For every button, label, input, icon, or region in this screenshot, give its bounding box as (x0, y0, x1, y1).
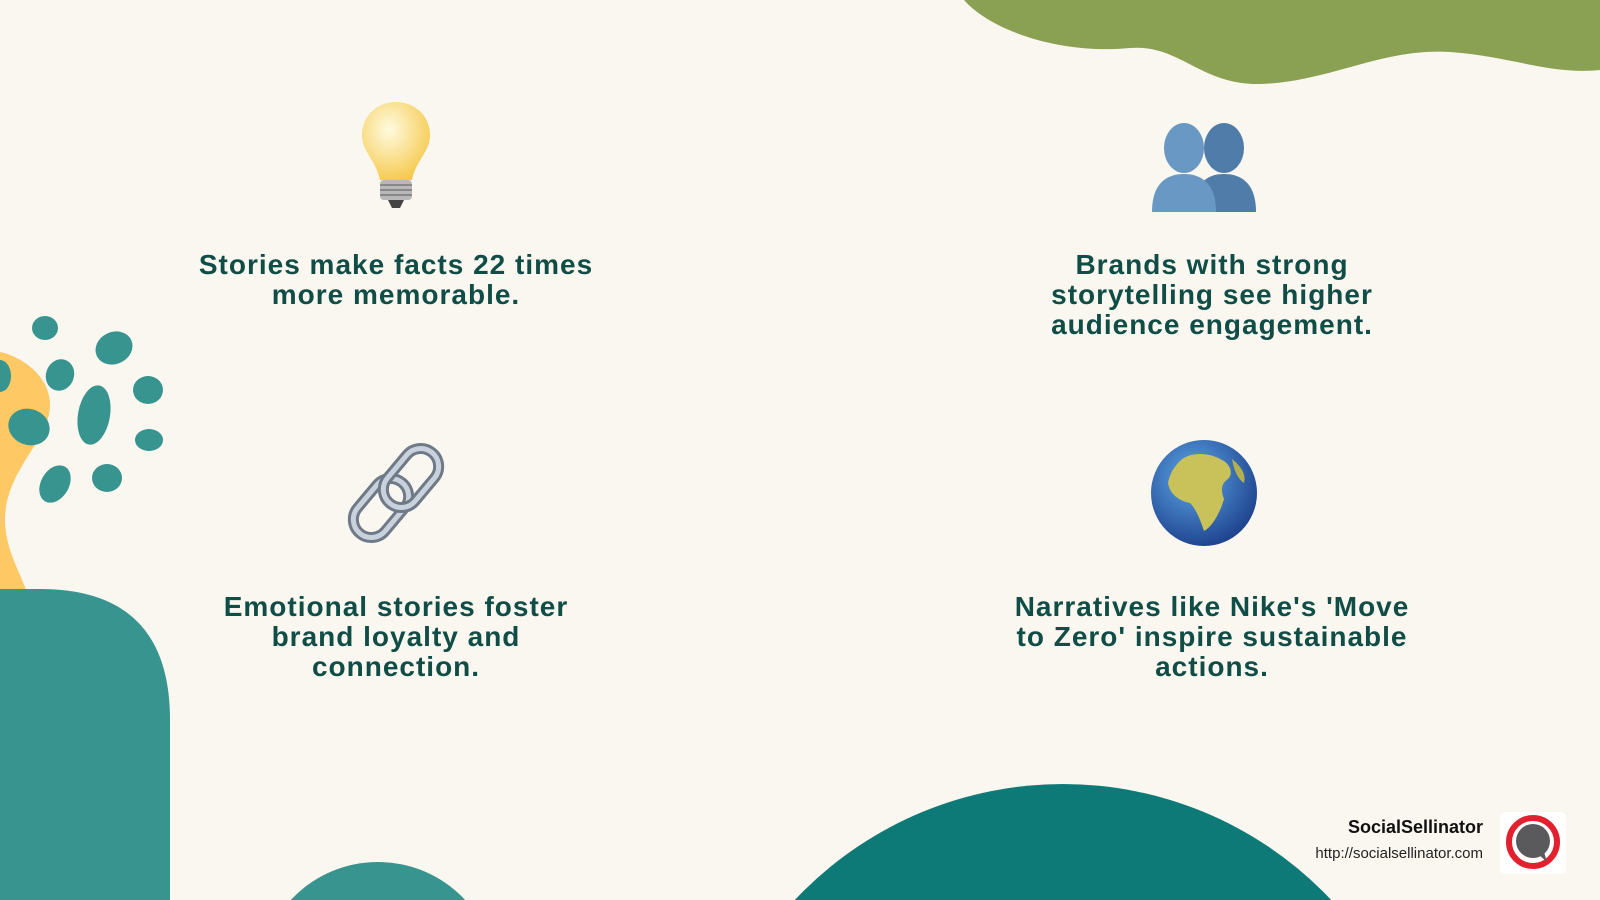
icon: two people (1152, 123, 1256, 212)
text: stat 2: audience engagement. (1051, 309, 1373, 340)
text: stat 4 (1015, 591, 1409, 682)
icon: globe (1151, 440, 1257, 546)
text: stat 2 (1051, 249, 1373, 340)
text: stat 4: to Zero' inspire sustainable (1017, 621, 1407, 652)
text: stat 3: Emotional stories foster (224, 591, 568, 622)
text: stat 2: storytelling see higher (1051, 279, 1373, 310)
brand name: SocialSellinator (1348, 817, 1483, 837)
brand url: http://socialsellinator.com (1315, 845, 1483, 862)
text: stat 3: connection. (312, 651, 480, 682)
text: stat 1 (199, 249, 593, 310)
text: stat 1: more memorable. (272, 279, 520, 310)
text: stat 1: Stories make facts 22 times (199, 249, 593, 280)
brand block (1315, 812, 1566, 874)
text: stat 3: brand loyalty and (272, 621, 520, 652)
icon: light bulb (362, 102, 430, 208)
text: stat 2: Brands with strong (1075, 249, 1349, 280)
icon: logo (1500, 812, 1566, 874)
text: stat 4: Narratives like Nike's 'Move (1015, 591, 1409, 622)
icon: chain link (348, 443, 444, 543)
text: stat 4: actions. (1155, 651, 1269, 682)
text: stat 3 (224, 591, 568, 682)
